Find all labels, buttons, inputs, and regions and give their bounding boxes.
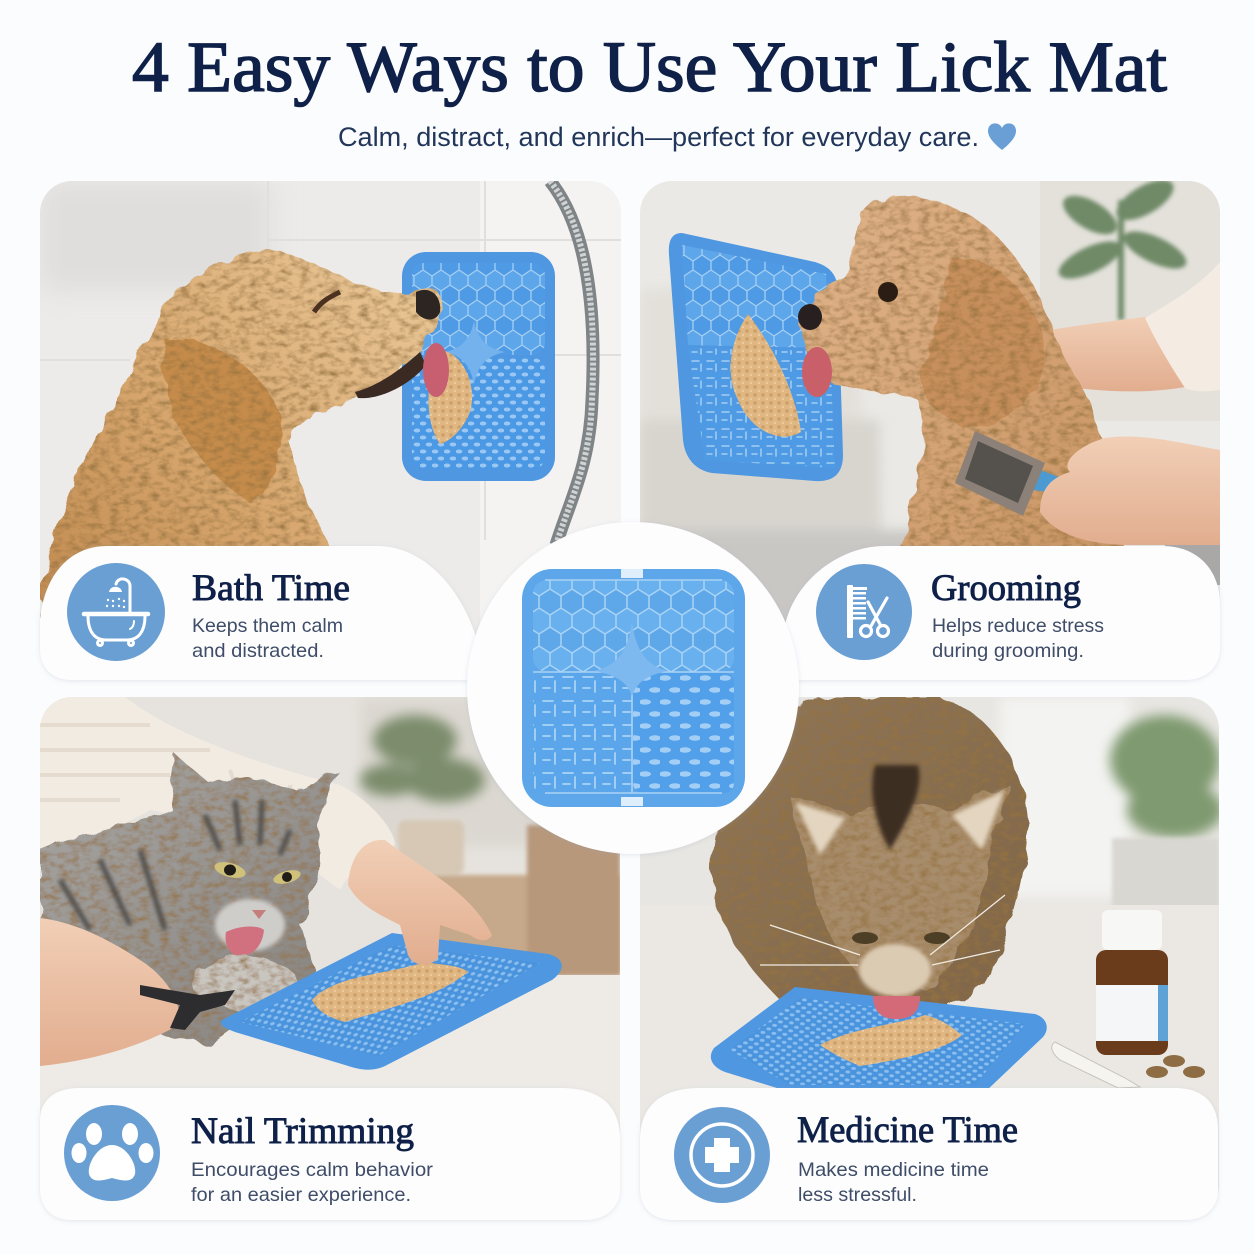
title: 4 Easy Ways to Use Your Lick Mat <box>132 27 1167 107</box>
tongue <box>873 996 920 1019</box>
cat ears <box>795 790 1005 855</box>
pills <box>1146 1055 1205 1078</box>
body text: for an easier experience. <box>191 1184 411 1206</box>
shower hose <box>550 181 593 545</box>
dropper <box>1052 1042 1140 1088</box>
heading: Medicine Time <box>797 1110 1018 1151</box>
icon: medical cross <box>674 1107 770 1203</box>
sleeve and arm <box>1053 316 1184 392</box>
photo: wet golden dog licking wall mat <box>40 181 621 635</box>
cat paw <box>193 956 297 1010</box>
caption card <box>640 1088 1218 1220</box>
cat stripes <box>60 800 290 930</box>
hand with brush <box>955 431 1220 545</box>
heading: Nail Trimming <box>191 1111 414 1152</box>
heading: Bath Time <box>192 568 350 609</box>
heading: Grooming <box>931 568 1081 609</box>
body text: during grooming. <box>932 640 1084 662</box>
lick mat <box>522 569 745 807</box>
hand with clipper <box>40 918 235 1066</box>
icon: comb and scissors <box>816 564 912 660</box>
photo: poodle being brushed <box>640 181 1220 622</box>
poodle ear <box>920 258 1046 428</box>
peanut butter smear <box>428 350 472 444</box>
dog nose and mouth <box>416 290 440 320</box>
body text: Helps reduce stress <box>932 615 1104 637</box>
subtitle: Calm, distract, and enrich—perfect for everyday care. <box>338 122 979 152</box>
caption card <box>40 1088 620 1220</box>
icon: heart <box>988 123 1016 150</box>
table <box>552 975 620 980</box>
body text: Encourages calm behavior <box>191 1159 434 1181</box>
panel: grooming <box>640 172 1225 690</box>
mat <box>669 233 843 481</box>
body text: Makes medicine time <box>798 1159 989 1181</box>
plant <box>1054 172 1191 320</box>
photo: tabby cat licking mat beside medicine <box>640 697 1223 1225</box>
dog body <box>40 249 443 618</box>
cat body <box>40 755 338 1045</box>
panel: medicine time <box>640 697 1223 1225</box>
panel: nail trimming <box>40 697 620 1225</box>
body text <box>798 1159 989 1206</box>
mat on wall <box>402 252 555 481</box>
center medallion with lick mat <box>467 522 799 854</box>
photo: grey cat having nails trimmed <box>40 697 620 1134</box>
wooden furniture <box>430 875 620 975</box>
icon: bathtub <box>67 563 165 661</box>
panel: bath time <box>40 181 621 690</box>
medicine bottle <box>1096 910 1168 1055</box>
body text: Keeps them calm <box>192 615 343 637</box>
body text: and distracted. <box>192 640 324 662</box>
peanut butter smear <box>312 962 468 1022</box>
poodle body <box>798 196 1124 546</box>
dog ear <box>163 339 282 502</box>
plant and pot <box>1110 715 1223 838</box>
cat muzzle and eyes <box>760 895 1005 996</box>
table <box>1112 905 1219 939</box>
caption card <box>785 546 1220 680</box>
mat tilted <box>221 933 562 1070</box>
mat flat <box>711 987 1047 1092</box>
cat face <box>213 859 302 956</box>
caption card <box>40 546 477 680</box>
nose, eye and tongue <box>798 304 822 330</box>
cat stripes <box>872 765 919 850</box>
icon: paw <box>64 1105 160 1201</box>
striped sleeve <box>40 697 395 890</box>
cat head <box>790 785 1010 998</box>
hand holding mat <box>348 840 492 964</box>
body text: less stressful. <box>798 1184 917 1206</box>
body text <box>191 1159 434 1206</box>
body text <box>932 615 1104 662</box>
peanut butter smear <box>731 314 801 437</box>
peanut butter smear <box>820 1015 962 1066</box>
plant and pot <box>360 715 485 802</box>
cat body <box>712 697 1028 1020</box>
body text <box>192 615 343 662</box>
